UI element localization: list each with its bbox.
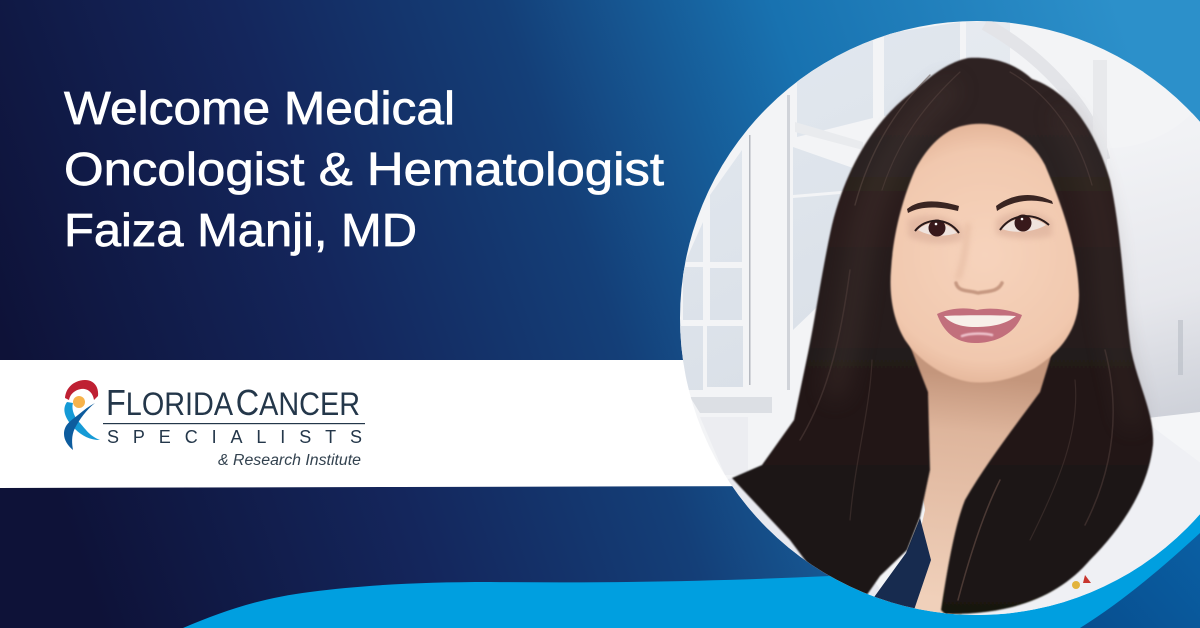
bottom right dark blue corner: [1080, 533, 1200, 628]
navy blouse: [872, 518, 931, 610]
photo backdrop: [680, 20, 1200, 620]
white doctor coat: [728, 478, 1200, 615]
title text: [64, 82, 664, 256]
logo research institute line: & Research Institute: [218, 452, 361, 469]
logo specialists line: SPECIALISTS: [107, 427, 362, 447]
face: [891, 124, 1079, 382]
right wall: [1121, 113, 1200, 418]
white logo band: [0, 360, 800, 488]
wall handle detail: [1178, 320, 1183, 375]
window panes: [680, 22, 1010, 475]
nose shadow: [956, 225, 1002, 293]
left eye: [908, 215, 962, 243]
long dark hair: [732, 58, 1153, 614]
mouth: [937, 308, 1022, 343]
coat logo badge: [1072, 575, 1091, 589]
title line three: Faiza Manji, MD: [64, 204, 417, 256]
title line two: Oncologist & Hematologist: [64, 143, 664, 195]
neck and chest: [903, 345, 1052, 615]
curved atrium arch: [985, 24, 1104, 190]
logo wordmark: FLORIDACANCER: [106, 382, 360, 423]
right eye: [996, 211, 1052, 239]
bottom light blue wave: [183, 505, 1200, 628]
title line one: Welcome Medical: [64, 82, 455, 134]
right eyebrow: [996, 195, 1053, 211]
circular portrait photo: [680, 20, 1200, 628]
left eyebrow: [907, 201, 959, 213]
logo rule: [103, 423, 365, 424]
logo ribbon icon: [64, 380, 100, 450]
hair highlights: [800, 72, 1132, 600]
floor highlight: [1150, 412, 1200, 440]
Florida Cancer Specialists logo: [64, 380, 365, 469]
